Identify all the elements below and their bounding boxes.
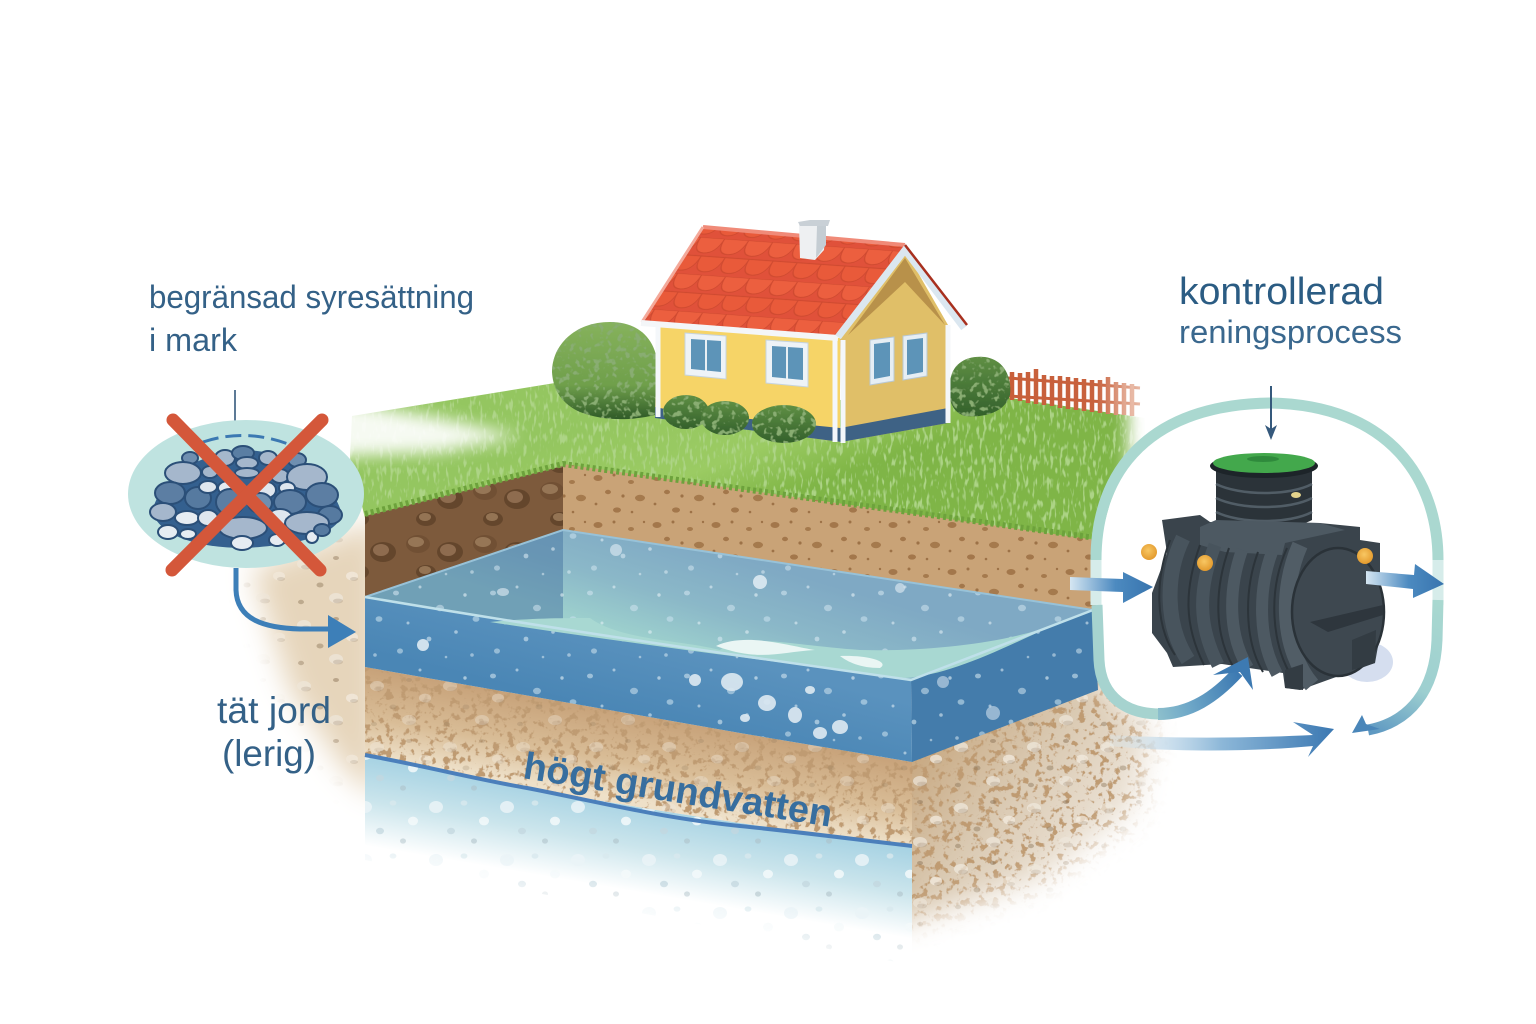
- leader line: [234, 390, 236, 423]
- label: kontrollerad reningsprocess: reningsprocess: [1179, 314, 1402, 350]
- label: begränsad syresättning i mark: i mark: [149, 322, 238, 358]
- grass fade patch on the left: [320, 400, 520, 456]
- sand layer: [365, 667, 912, 846]
- bush: large left: [552, 322, 658, 419]
- ground cross-section: [200, 383, 1200, 965]
- side water face: [911, 610, 1098, 762]
- tank neck: [1216, 468, 1312, 529]
- soil right of the block: [912, 682, 1166, 940]
- ring pale connector right: [1432, 560, 1444, 605]
- neck fittings: [1291, 492, 1301, 498]
- label: tät jord (lerig): [217, 690, 331, 774]
- ellipse background: [128, 420, 364, 568]
- tank shadow: [1341, 642, 1393, 682]
- window 3: [870, 337, 894, 385]
- tank: [1141, 453, 1393, 690]
- bush: right: [950, 357, 1010, 416]
- darker left of top surface: [365, 530, 563, 632]
- fence: [1008, 369, 1140, 416]
- label: begränsad syresättning i mark: [149, 279, 474, 358]
- stone pile: [150, 446, 342, 550]
- heading: högt grundvatten: högt grundvatten: [521, 745, 835, 836]
- water body: [365, 530, 1098, 762]
- chimney: [798, 220, 830, 260]
- pale soil left of the cut: [242, 512, 366, 802]
- arrow head under tank: [1213, 657, 1253, 690]
- water edge line: [365, 530, 1093, 610]
- window 4: [903, 333, 927, 380]
- large bubbles: [417, 544, 1000, 739]
- window 1: [685, 333, 726, 379]
- down arrow to tank: [1265, 386, 1277, 440]
- lower bypass arrow: [1110, 722, 1334, 757]
- body ribs: [1159, 538, 1312, 685]
- groundwater level line: [365, 755, 912, 846]
- soil back wall right: [563, 464, 1096, 612]
- roof ridge: [703, 227, 905, 245]
- ring into tank arrow: [1158, 672, 1238, 714]
- process ring: [1096, 403, 1438, 730]
- outlet arrow: [1366, 564, 1444, 598]
- end cap handle: [1310, 605, 1383, 632]
- label: tät jord (lerig): (lerig): [222, 733, 316, 774]
- house: [641, 220, 967, 443]
- gable trim: [838, 250, 964, 337]
- ring right lower: [1368, 600, 1438, 730]
- ring upper: [1096, 403, 1438, 560]
- arrow from stones to water: [236, 568, 356, 648]
- tank lid: [1210, 454, 1318, 478]
- tank body: [1152, 515, 1385, 690]
- label: begränsad syresättning i mark: begränsad syresättning: [149, 279, 474, 315]
- deep groundwater: [365, 755, 912, 965]
- water wave highlight: [490, 618, 1060, 678]
- left callout: stones: [128, 390, 364, 570]
- roof left edge: [642, 227, 703, 322]
- label: kontrollerad reningsprocess: [1179, 271, 1402, 350]
- top deck: [1200, 520, 1345, 555]
- side wall: [840, 250, 948, 442]
- roof base: [642, 227, 905, 335]
- neck ribs: [1216, 484, 1312, 521]
- white interior behind ring: [1100, 406, 1436, 765]
- inlet arrow: [1070, 572, 1153, 603]
- return arrow head: [1352, 715, 1380, 733]
- window 2: [766, 340, 808, 387]
- wall corners and downpipe: [658, 325, 948, 443]
- front water face: [365, 597, 912, 762]
- grass surface: [350, 383, 1145, 541]
- eave: [641, 323, 838, 338]
- label: kontrollerad reningsprocess: kontrollerad: [1179, 271, 1384, 313]
- serrated grass edge: [365, 464, 1096, 538]
- ring pale connector left: [1090, 560, 1102, 605]
- red cross: [172, 420, 322, 570]
- label: tät jord (lerig): tät jord: [217, 690, 331, 731]
- front wall: [655, 327, 840, 442]
- feet: [1285, 630, 1376, 690]
- tank end cap: [1292, 548, 1384, 676]
- water front edge highlight: [365, 597, 1093, 680]
- orange fittings: [1141, 544, 1373, 571]
- ring left lower: [1097, 605, 1160, 714]
- gable shade: [848, 258, 945, 335]
- water top surface: [365, 530, 1093, 680]
- foundation: [655, 407, 948, 442]
- roof tiles: [642, 227, 905, 335]
- soil back wall left: [365, 466, 563, 597]
- stone pile base: [152, 450, 342, 548]
- bushes in front of house: [663, 395, 816, 443]
- dashed arc: [203, 435, 288, 444]
